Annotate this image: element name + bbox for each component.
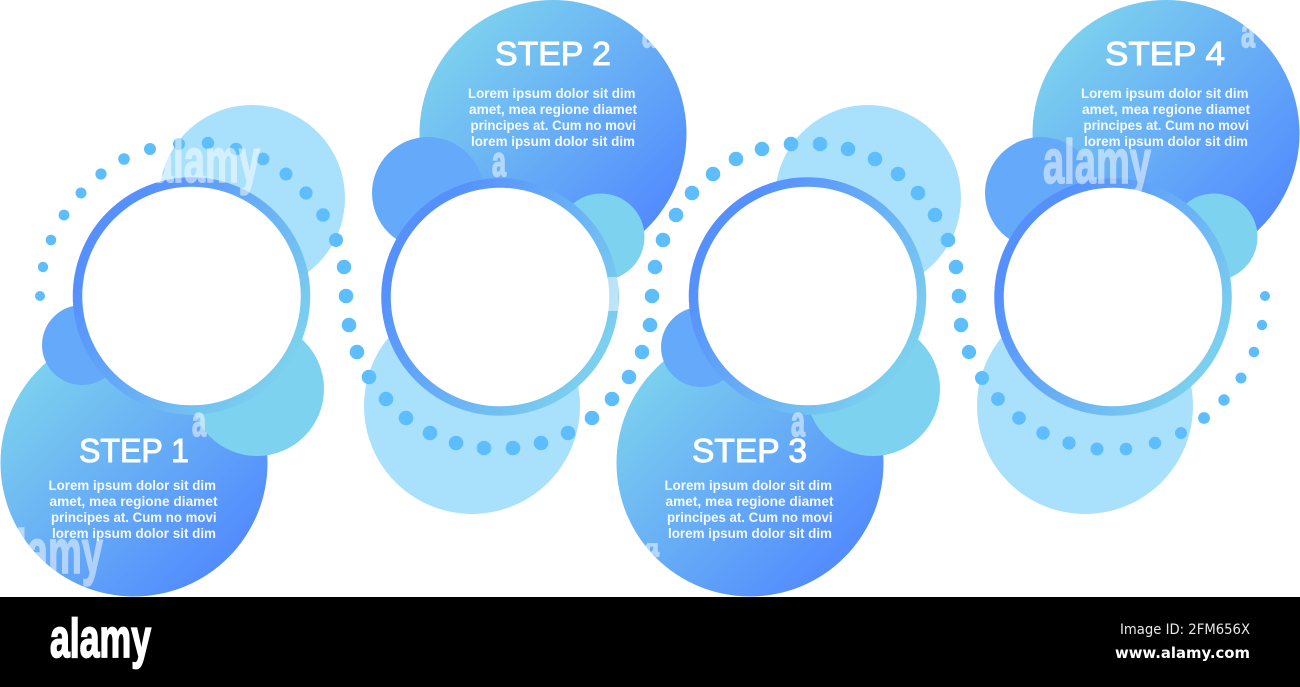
step 1 body text: lorem ipsum dolor sit dim bbox=[52, 525, 216, 541]
panel: step 1 bbox=[0, 105, 345, 596]
step 4 body text bbox=[1081, 85, 1250, 149]
step 2 small blue circle bbox=[372, 137, 484, 249]
step 1 body text: principes at. Cum no movi bbox=[51, 509, 216, 525]
step 1 body text bbox=[48, 477, 218, 541]
watermarks: a bbox=[791, 398, 806, 446]
step 2 light circle bbox=[364, 298, 580, 514]
step 1 heading: STEP 1 bbox=[79, 432, 189, 469]
step 4 body text: lorem ipsum dolor sit dim bbox=[1084, 133, 1248, 149]
step 3 light circle bbox=[775, 105, 961, 291]
watermarks: alamy bbox=[0, 518, 103, 587]
watermarks: a bbox=[642, 9, 657, 57]
step 3 body text: principes at. Cum no movi bbox=[667, 509, 832, 525]
step 3 body text: Lorem ipsum dolor sit dim bbox=[664, 477, 832, 493]
step 3 heading: STEP 3 bbox=[692, 432, 807, 469]
step 1 body text: Lorem ipsum dolor sit dim bbox=[48, 477, 216, 493]
image id: Image ID: 2FM656X bbox=[1120, 622, 1250, 638]
step 2 body text: lorem ipsum dolor sit dim bbox=[471, 133, 635, 149]
step 1 large gradient circle bbox=[0, 330, 268, 596]
step 3 small blue circle bbox=[661, 307, 741, 387]
step 4 ring bbox=[999, 183, 1227, 411]
step 2 teal circle bbox=[558, 194, 644, 280]
step 3 body text: amet, mea regione diamet bbox=[666, 493, 834, 509]
panel: step 3 bbox=[616, 105, 961, 596]
step 3 body text bbox=[664, 477, 834, 541]
footer bar bbox=[0, 597, 1300, 687]
step 1 ring bbox=[78, 182, 306, 410]
watermarks: alamy bbox=[152, 127, 260, 196]
panel: step 2 bbox=[364, 0, 686, 514]
step 3 body text: lorem ipsum dolor sit dim bbox=[668, 525, 832, 541]
step 4 body text: Lorem ipsum dolor sit dim bbox=[1081, 85, 1248, 101]
step 1 body text: amet, mea regione diamet bbox=[50, 493, 218, 509]
step 2 ring bbox=[386, 183, 614, 411]
step 2 heading: STEP 2 bbox=[495, 35, 611, 72]
watermarks: a bbox=[645, 518, 660, 566]
step 1 teal circle bbox=[190, 322, 324, 456]
watermarks: a bbox=[192, 398, 207, 446]
watermarks: a bbox=[1241, 9, 1256, 57]
step 4 large gradient circle bbox=[1032, 0, 1300, 267]
step 1 light circle bbox=[159, 105, 345, 291]
step 4 small blue circle bbox=[985, 137, 1097, 249]
step 3 large gradient circle bbox=[616, 330, 884, 596]
step 4 teal circle bbox=[1170, 194, 1258, 280]
website: www.alamy.com bbox=[1115, 644, 1250, 662]
step 2 body text bbox=[468, 85, 637, 149]
step 2 large gradient circle bbox=[420, 0, 686, 267]
step 3 teal circle bbox=[806, 322, 940, 456]
dotted connector path bbox=[35, 137, 1270, 455]
step 4 heading: STEP 4 bbox=[1105, 35, 1225, 72]
step 4 light circle bbox=[977, 298, 1193, 514]
step 4 body text: amet, mea regione diamet bbox=[1082, 101, 1250, 117]
step 4 body text: principes at. Cum no movi bbox=[1084, 117, 1249, 133]
panel: step 4 bbox=[977, 0, 1300, 514]
watermarks: alamy bbox=[1043, 128, 1151, 197]
step 2 body text: principes at. Cum no movi bbox=[470, 117, 636, 133]
watermarks: a bbox=[492, 138, 507, 186]
step 3 ring bbox=[694, 182, 922, 410]
step 1 small blue circle bbox=[42, 305, 122, 385]
footer logo: alamy bbox=[50, 607, 151, 669]
step 2 body text: amet, mea regione diamet bbox=[469, 101, 637, 117]
step 2 body text: Lorem ipsum dolor sit dim bbox=[468, 85, 636, 101]
